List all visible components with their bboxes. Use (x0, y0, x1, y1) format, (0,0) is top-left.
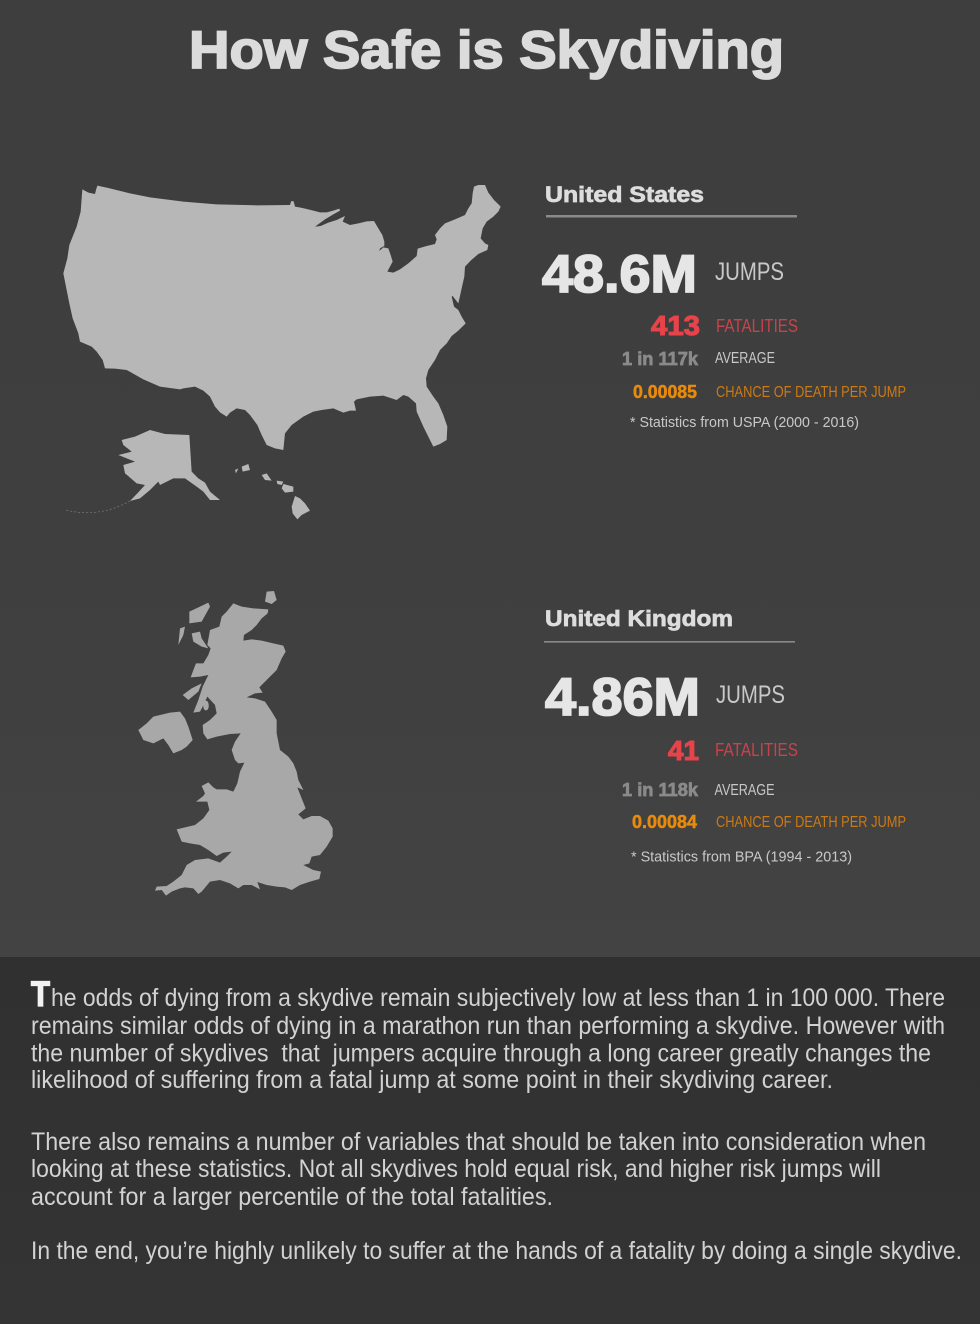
map: United Kingdom (138, 591, 333, 896)
paragraph 1: likelihood of suffering from a fatal jump at some point in their skydiving career. (31, 1066, 833, 1094)
panel: text background (0, 957, 980, 1324)
chance label: CHANCE OF DEATH PER JUMP (716, 814, 906, 831)
paragraph 2: account for a larger percentile of the total fatalities. (31, 1183, 553, 1211)
average number: 1 in 118k (622, 780, 699, 800)
paragraph 2: There also remains a number of variables that should be taken into consideration when (31, 1128, 926, 1156)
panel: United States statistics (542, 182, 906, 431)
heading: United Kingdom: United Kingdom (545, 606, 733, 631)
average label: AVERAGE (715, 350, 775, 367)
fatalities label: FATALITIES (715, 739, 798, 760)
paragraph 2: looking at these statistics. Not all skydives hold equal risk, and higher risk jumps will (31, 1155, 881, 1183)
fatalities number: 413 (651, 310, 700, 341)
chance number: 0.00084 (632, 812, 697, 832)
rule (546, 215, 797, 218)
map: Alaska (118, 430, 220, 501)
fatalities number: 41 (668, 735, 699, 766)
map: Northern Ireland (138, 712, 193, 753)
panel: map and statistics background (0, 0, 980, 958)
paragraph 1: the number of skydives that jumpers acquire through a long career greatly changes the (31, 1040, 931, 1068)
average number: 1 in 117k (622, 349, 699, 369)
drop cap: T (31, 975, 50, 1014)
paragraph 2 (31, 1128, 926, 1211)
heading: United States: United States (545, 182, 704, 207)
title: How Safe is Skydiving (189, 21, 784, 80)
jumps label: JUMPS (715, 258, 784, 286)
map: Hawaii (235, 464, 310, 519)
map: Aleutian islands (65, 501, 130, 513)
panel: United Kingdom statistics (544, 606, 906, 866)
jumps number: 48.6M (542, 245, 697, 304)
average label: AVERAGE (714, 782, 774, 799)
source note: * Statistics from USPA (2000 - 2016) (630, 414, 859, 431)
rule (544, 641, 795, 643)
map: United States (63, 185, 501, 519)
jumps label: JUMPS (716, 681, 785, 709)
chance number: 0.00085 (633, 382, 697, 402)
text block: explanation (31, 975, 962, 1265)
paragraph 1 (31, 984, 945, 1094)
map: Scottish islands (178, 591, 277, 710)
jumps number: 4.86M (545, 668, 700, 727)
source note: * Statistics from BPA (1994 - 2013) (631, 848, 852, 866)
fatalities label: FATALITIES (716, 315, 798, 336)
chance label: CHANCE OF DEATH PER JUMP (716, 384, 906, 401)
